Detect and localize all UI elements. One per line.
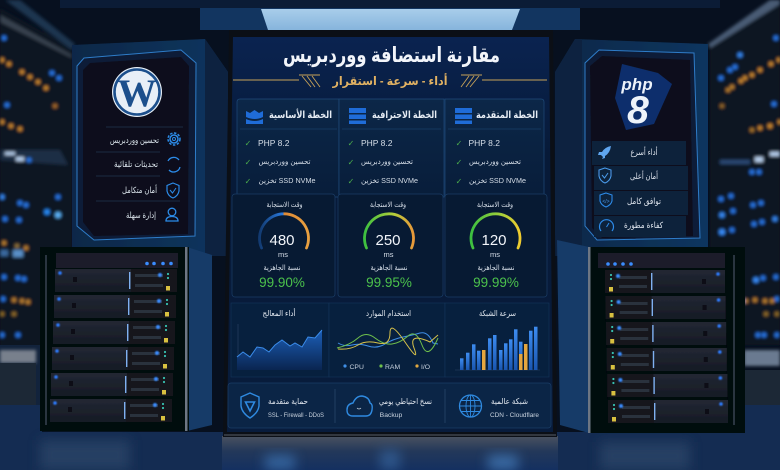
- plan card: basic: ✓: [245, 177, 251, 186]
- right server tower with PHP panel: [555, 39, 708, 256]
- left server rack: [40, 247, 212, 431]
- plan card: advanced: تخزين SSD NVMe: [469, 176, 526, 185]
- plan card: professional: PHP 8.2: [361, 138, 393, 148]
- item: automatic updates: تحديثات تلقائية: [114, 159, 159, 169]
- metric box: advanced: 99.99%: [473, 275, 519, 290]
- right server rack: [557, 240, 745, 433]
- item: full compatibility: </>: [602, 199, 610, 205]
- plan card: advanced: ✓: [456, 177, 462, 186]
- plan card: professional: الخطة الاحترافية: [372, 110, 437, 121]
- chart panel: resource usage: [329, 303, 445, 377]
- icon: PHP 8 badge: 8: [627, 89, 649, 132]
- icon: WordPress logo: [112, 67, 162, 117]
- screen frame: [77, 50, 196, 240]
- icon: advanced plan: [455, 108, 472, 124]
- feature: advanced protection: [241, 393, 324, 419]
- metric box: basic: [232, 194, 335, 297]
- metric box: basic: وقت الاستجابة: [266, 200, 303, 209]
- gauge: 250 ms: [364, 214, 413, 259]
- metric box: professional: وقت الاستجابة: [370, 200, 406, 209]
- metric box: basic: نسبة الجاهزية: [264, 263, 300, 272]
- icon: WordPress logo: W: [118, 72, 156, 115]
- item: higher security: أمان أعلى: [630, 170, 658, 181]
- subtitle with ornaments: أداء - سرعة - استقرار: [332, 73, 448, 88]
- left blurred server aisle: [0, 0, 75, 348]
- gauge: 480 ms: ms: [278, 250, 288, 259]
- gauge: 120 ms: 120: [481, 232, 507, 249]
- screen frame: [585, 50, 700, 240]
- plan card: advanced: [445, 99, 544, 197]
- metric box: advanced: نسبة الجاهزية: [478, 263, 514, 272]
- icon: PHP 8 badge: [615, 64, 672, 132]
- plan card: basic: تحسين ووردبريس: [258, 157, 310, 166]
- gauge: 250 ms: ms: [384, 250, 394, 259]
- metric box: advanced: وقت الاستجابة: [477, 200, 513, 209]
- chart panel: CPU performance: [231, 303, 329, 377]
- plan card: professional: ✓: [348, 139, 354, 148]
- area chart: [237, 324, 322, 370]
- metric box: professional: 99.95%: [366, 275, 412, 290]
- item: easy management: إدارة سهلة: [126, 210, 156, 221]
- legend: [343, 364, 430, 371]
- title: مقارنة استضافة ووردبريس: [283, 44, 500, 67]
- metric box: advanced: [445, 194, 547, 297]
- item: optimize WordPress: تحسين ووردبريس: [110, 135, 159, 145]
- plan card: advanced: تحسين ووردبريس: [469, 157, 521, 166]
- metric box: professional: [338, 194, 443, 297]
- subtitle with ornaments: [233, 73, 547, 88]
- legend: I/O: [421, 364, 430, 371]
- icon: PHP 8 badge: php: [620, 75, 653, 94]
- item: full compatibility: [600, 193, 662, 207]
- plan card: basic: ✓: [245, 158, 251, 167]
- feature: global network: شبكة عالمية: [491, 397, 528, 406]
- gauge: 480 ms: 480: [269, 232, 295, 249]
- gauge: 250 ms: 250: [375, 232, 401, 249]
- gauge: 120 ms: [471, 214, 520, 259]
- bottom feature strip: [228, 383, 551, 428]
- feature: daily backup: Backup: [380, 412, 403, 419]
- item: integrated security: أمان متكامل: [122, 184, 157, 195]
- plan card: basic: تخزين SSD NVMe: [258, 176, 316, 185]
- list: WordPress features: [96, 127, 183, 221]
- line chart: [337, 328, 438, 355]
- plan card: professional: [339, 99, 444, 197]
- metric box: professional: نسبة الجاهزية: [370, 263, 408, 272]
- feature: daily backup: نسخ احتياطي يومي: [379, 397, 432, 406]
- gauge: 120 ms: ms: [490, 250, 500, 259]
- plan card: basic: الخطة الأساسية: [269, 108, 332, 121]
- right blurred server aisle: [708, 0, 780, 345]
- feature: advanced protection: حماية متقدمة: [268, 397, 308, 406]
- plan card: advanced: الخطة المتقدمة: [476, 110, 538, 121]
- central comparison panel: [223, 30, 557, 437]
- plan card: professional: تخزين SSD NVMe: [361, 176, 418, 185]
- list: PHP features: [592, 141, 688, 237]
- plan card: professional: ✓: [348, 158, 354, 167]
- icon: basic plan: [246, 110, 263, 124]
- chart panel: network speed: [445, 303, 549, 377]
- ceiling light: [261, 9, 520, 30]
- gauge: 480 ms: [259, 214, 308, 259]
- plan card: advanced: ✓: [456, 158, 462, 167]
- chart panel: resource usage: استخدام الموارد: [366, 309, 411, 318]
- feature: global network: CDN - Cloudflare: [490, 412, 539, 419]
- plan card: advanced: ✓: [456, 139, 462, 148]
- plan card: basic: ✓: [245, 139, 251, 148]
- plan card: professional: ✓: [348, 177, 354, 186]
- chart panel: network speed: سرعة الشبكة: [479, 309, 516, 318]
- chart panel: CPU performance: أداء المعالج: [262, 308, 296, 318]
- feature: daily backup: [347, 396, 432, 419]
- item: faster performance: أداء أسرع: [630, 146, 658, 157]
- bar chart: [455, 327, 540, 370]
- icon: professional plan: [349, 108, 366, 124]
- legend: CPU: [350, 364, 364, 371]
- legend: RAM: [385, 364, 400, 371]
- plan card: basic: PHP 8.2: [258, 138, 290, 148]
- feature: advanced protection: SSL - Firewall - DDoS: [268, 412, 324, 419]
- metric box: basic: 99.90%: [259, 275, 305, 290]
- plan card: professional: تحسين ووردبريس: [361, 157, 413, 166]
- floor: [0, 345, 780, 470]
- feature: global network: [460, 395, 539, 419]
- plan card: advanced: PHP 8.2: [468, 138, 500, 148]
- item: improved efficiency: كفاءة مطورة: [624, 220, 664, 230]
- plan card: basic: [237, 99, 339, 197]
- left server tower with WordPress panel: [72, 39, 228, 256]
- item: full compatibility: توافق كامل: [627, 196, 662, 206]
